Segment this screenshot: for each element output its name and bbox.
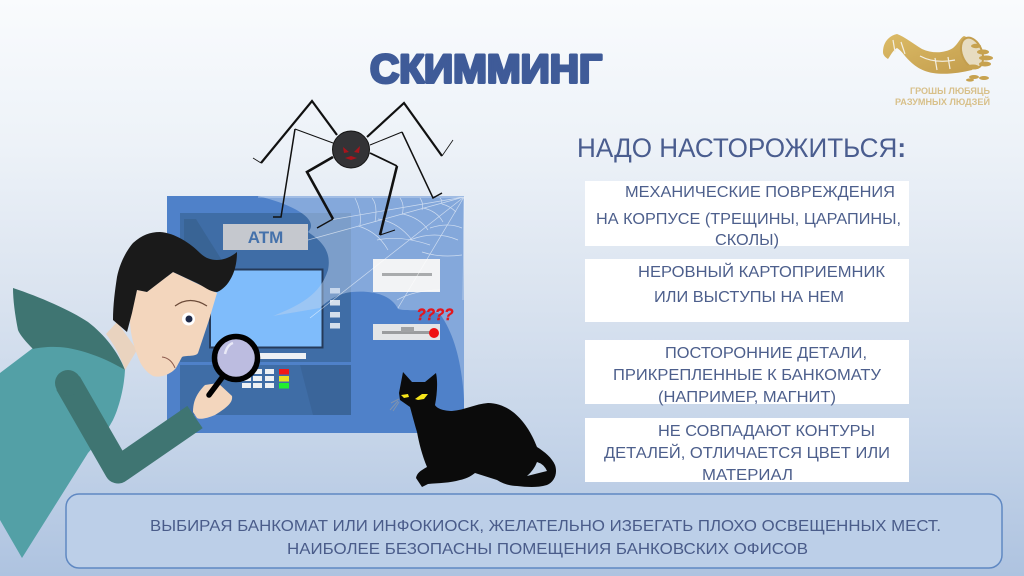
card reader panel	[373, 259, 440, 292]
keypad	[242, 369, 289, 388]
neck	[106, 322, 137, 370]
ATM sign	[223, 224, 308, 250]
callout: advice: НАИБОЛЕЕ БЕЗОПАСНЫ ПОМЕЩЕНИЯ БАНКОВСКИХ ОФИСОВ	[287, 541, 808, 558]
panel: mechanical damage	[585, 181, 909, 249]
heading: watch out: НАДО НАСТОРОЖИТЬСЯ:	[577, 133, 906, 163]
mouth	[162, 357, 175, 368]
magnifying glass	[209, 336, 258, 395]
panel: contours mismatch: НЕ СОВПАДАЮТ КОНТУРЫ	[658, 423, 875, 440]
ATM body	[167, 196, 464, 433]
panel: contours mismatch: МАТЕРИАЛ	[702, 467, 793, 484]
logo caption: РАЗУМНЫХ ЛЮДЗЕЙ	[895, 96, 990, 107]
cat body	[399, 372, 556, 487]
hair	[113, 232, 237, 332]
web-covered lighter area	[258, 196, 464, 400]
ATM lower panel	[180, 365, 351, 415]
callout: advice	[66, 494, 1002, 568]
panel: foreign parts: (НАПРИМЕР, МАГНИТ)	[658, 389, 836, 406]
receipt slot	[255, 353, 306, 359]
eyebrow	[175, 300, 207, 306]
panel: foreign parts: ПОСТОРОННИЕ ДЕТАЛИ,	[665, 345, 867, 362]
ATM sign: ATM	[248, 228, 283, 247]
hand	[193, 383, 232, 419]
black cat	[390, 372, 556, 487]
panel: uneven card reader: НЕРОВНЫЙ КАРТОПРИЕМНИК	[638, 262, 886, 281]
coat	[0, 345, 125, 558]
ATM illustration	[167, 196, 464, 433]
spider	[253, 101, 453, 235]
face	[130, 272, 217, 377]
panel: mechanical damage: НА КОРПУСЕ (ТРЕЩИНЫ, ЦАРАПИНЫ,	[596, 211, 901, 228]
eye	[182, 312, 195, 326]
spider body	[332, 131, 370, 168]
title: СКИММИНГ	[370, 48, 602, 92]
panel: uneven card reader	[585, 259, 909, 322]
panel: foreign parts: ПРИКРЕПЛЕННЫЕ К БАНКОМАТУ	[613, 367, 882, 384]
panel: mechanical damage: СКОЛЫ)	[715, 232, 779, 249]
spider web	[258, 197, 464, 318]
panel: mechanical damage: МЕХАНИЧЕСКИЕ ПОВРЕЖДЕНИЯ	[625, 184, 895, 201]
hood	[13, 288, 125, 370]
spider legs	[253, 101, 453, 235]
logo: cornucopia	[883, 34, 993, 107]
question marks: ????	[416, 305, 454, 324]
panel: contours mismatch: ДЕТАЛЕЙ, ОТЛИЧАЕТСЯ ЦВЕТ ИЛИ	[604, 443, 890, 462]
cat whiskers	[390, 399, 399, 411]
icon: golden horn	[883, 34, 993, 82]
cat eyes	[401, 394, 428, 400]
ATM upper panel	[180, 213, 351, 362]
logo caption	[895, 86, 991, 107]
card slot	[373, 324, 440, 340]
callout: advice: ВЫБИРАЯ БАНКОМАТ ИЛИ ИНФОКИОСК, ЖЕЛАТЕЛЬНО ИЗБЕГАТЬ ПЛОХО ОСВЕЩЕННЫХ МЕСТ.	[150, 518, 941, 535]
man	[0, 232, 258, 558]
side buttons	[330, 288, 340, 328]
spider eyes	[343, 146, 360, 160]
tail gap	[527, 462, 547, 476]
panel: uneven card reader: ИЛИ ВЫСТУПЫ НА НЕМ	[654, 289, 844, 306]
panel: contours mismatch	[585, 418, 909, 484]
panel: foreign parts	[585, 340, 909, 406]
ATM screen	[210, 270, 322, 348]
arm	[68, 383, 195, 470]
logo caption: ГРОШЫ ЛЮБЯЦЬ	[910, 86, 991, 96]
